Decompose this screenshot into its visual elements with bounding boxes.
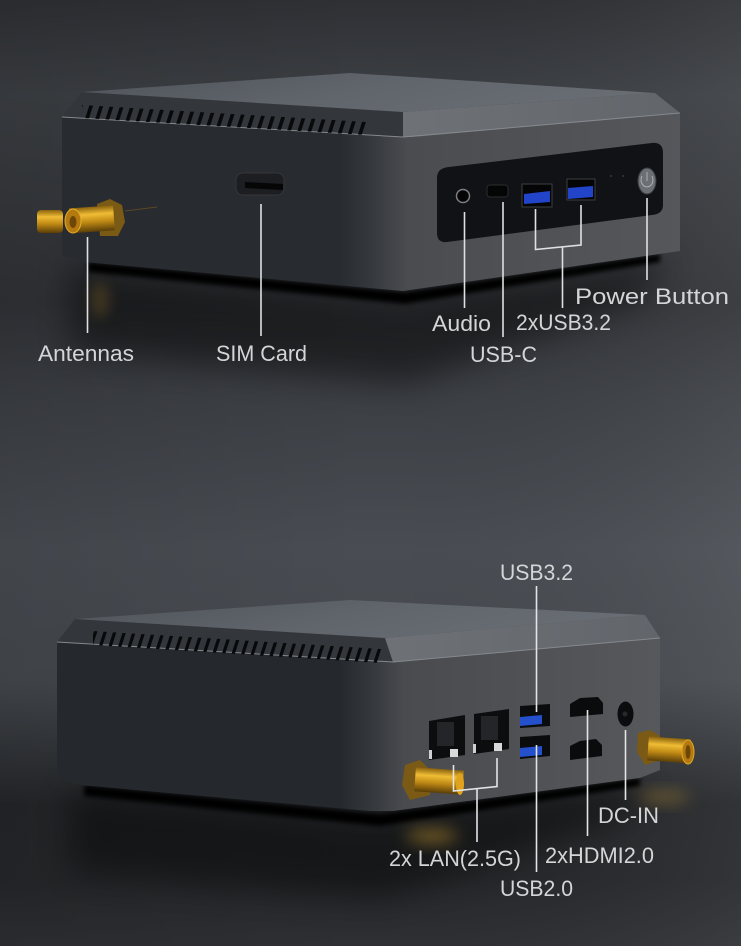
callout: Power Button: Power Button xyxy=(575,284,729,309)
top device: front I/O panel xyxy=(437,143,663,242)
callout: USB-C: USB-C xyxy=(470,342,537,367)
callout: 2x LAN(2.5G) xyxy=(389,758,521,871)
bottom device: HDMI ports xyxy=(570,697,603,760)
callout: USB2.0: USB2.0 xyxy=(500,876,573,901)
bottom device: USB ports xyxy=(520,704,550,759)
callout: Audio: Audio xyxy=(432,311,491,336)
bottom device: amber antenna reflections xyxy=(406,791,690,843)
callout: DC-IN xyxy=(598,730,659,828)
bottom device: rear view of the mini PC xyxy=(57,600,660,900)
callout: 2xHDMI2.0: 2xHDMI2.0 xyxy=(545,843,654,868)
top device: SIM card slot xyxy=(236,173,284,195)
bottom device: DC-IN jack xyxy=(618,702,634,726)
callout: Antennas: Antennas xyxy=(38,341,134,366)
callout: 2x LAN(2.5G): 2x LAN(2.5G) xyxy=(389,846,521,871)
callout: Antennas xyxy=(38,237,134,366)
callout: DC-IN: DC-IN xyxy=(598,803,659,828)
top device: gold antenna connectors xyxy=(37,199,157,236)
callout: 2xUSB3.2: 2xUSB3.2 xyxy=(516,310,611,335)
top device: front view of the mini PC xyxy=(62,73,680,385)
callout: USB3.2: USB3.2 xyxy=(500,560,573,585)
callout: 2xUSB3.2 xyxy=(516,205,611,335)
callout: Audio xyxy=(432,212,491,336)
bottom device: LAN ports xyxy=(429,709,509,760)
bottom device: gold antenna connectors xyxy=(402,730,694,800)
callout: SIM Card: SIM Card xyxy=(216,341,307,366)
